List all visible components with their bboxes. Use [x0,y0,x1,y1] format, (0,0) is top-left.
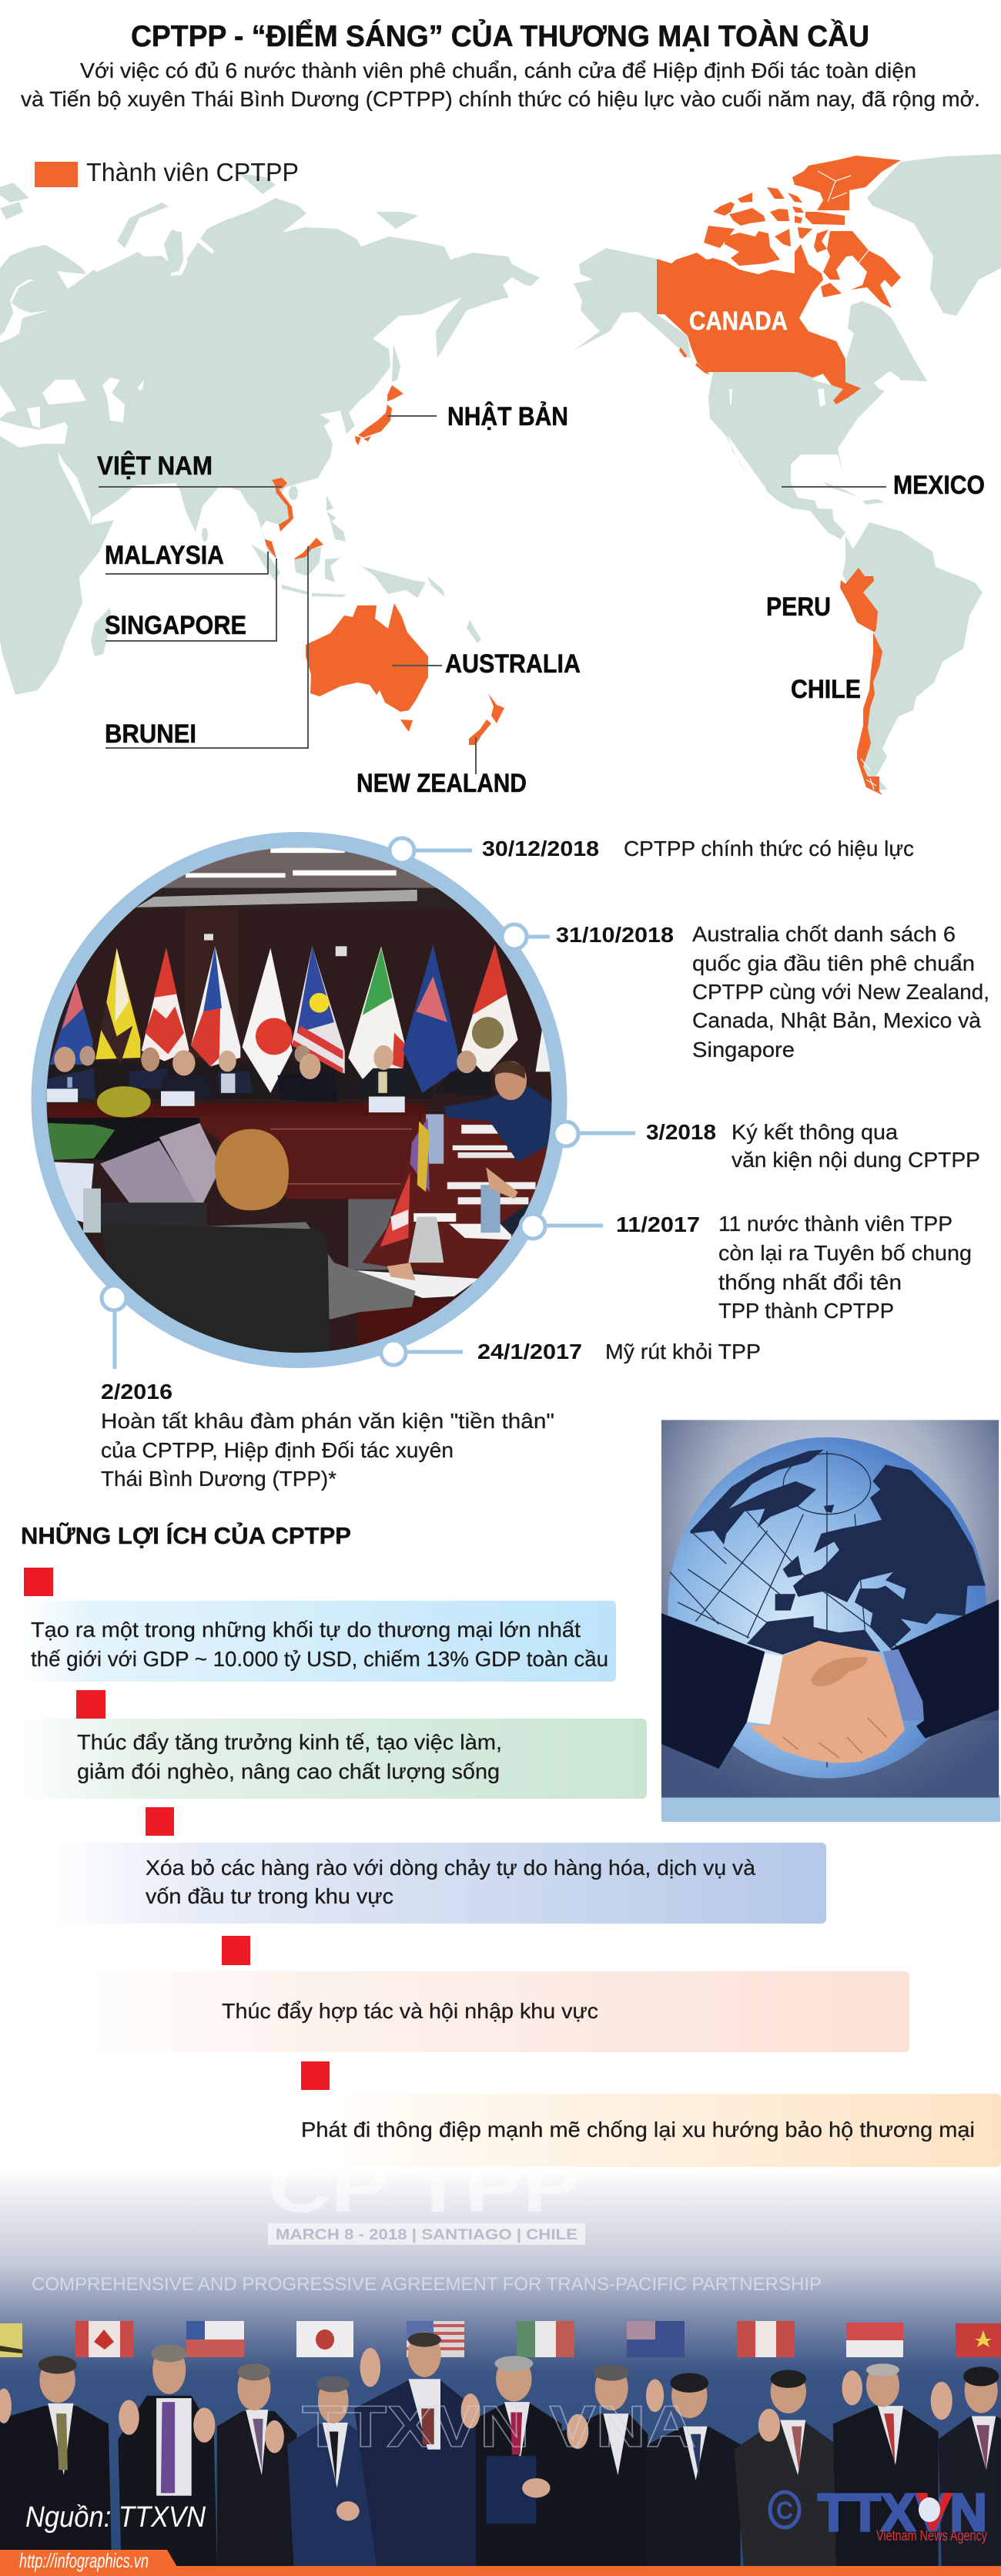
map labels with leader lines: BRUNEI [105,719,196,749]
right side table [348,1114,554,1351]
backdrop text [32,2166,821,2290]
intro text [21,59,980,111]
connectors and nodes [102,838,635,1369]
event 2/2016: của CPTPP, Hiệp định Đối tác xuyên [101,1438,454,1462]
event 24/1/2017: 24/1/2017 [477,1340,582,1363]
benefit 5 [293,2061,1001,2167]
flags behind the table [49,944,554,1093]
event 3/2018 [646,1120,980,1172]
event 31/10/2018: CPTPP cùng với New Zealand, [692,980,989,1004]
logo: TTXVN: C [776,2497,793,2524]
benefit 3: vốn đầu tư trong khu vực [146,1884,393,1908]
name plates [47,1088,405,1112]
circular meeting photo [46,847,551,1353]
Ellesmere fjords [818,171,876,790]
handshake artwork [661,1420,999,1798]
event 31/10/2018 [556,922,989,1062]
man in blue suit [444,1062,554,1162]
benefit 3: Xóa bỏ các hàng rào với dòng chảy tự do hàng hóa, dịch vụ và [146,1856,755,1880]
map labels with leader lines: AUSTRALIA [445,649,581,679]
event 24/1/2017: Mỹ rút khỏi TPP [605,1340,761,1363]
legend: Thành viên CPTPP [86,158,299,186]
handshake and globe photo [661,1420,1000,1822]
map labels with leader lines: PERU [766,592,831,622]
CPTPP members in orange [265,156,901,795]
event 31/10/2018: Australia chốt danh sách 6 [692,922,956,946]
water cut-outs [0,234,902,524]
watermark: TTXVN VNA [302,2394,696,2460]
map labels with leader lines: SINGAPORE [105,611,246,640]
event 11/2017 [616,1212,972,1323]
event 31/10/2018: 31/10/2018 [556,923,674,947]
logo: TTXVN: TTXVN [818,2483,987,2542]
map labels with leader lines: CANADA [689,307,788,336]
intro text: và Tiến bộ xuyên Thái Bình Dương (CPTPP) chính thức có hiệu lực vào cuối năm nay, đã rộng mở. [21,87,980,111]
map labels with leader lines: NEW ZEALAND [357,769,527,798]
map labels with leader lines: NHẬT BẢN [447,402,568,431]
bottom photo: signing ceremony [0,2148,1001,2576]
benefits heading: NHỮNG LỢI ÍCH CỦA CPTPP [21,1521,351,1549]
event 30/12/2018 [482,837,914,860]
event 2/2016 [101,1380,554,1491]
event 2/2016: Thái Bình Dương (TPP)* [101,1467,336,1491]
world map [0,154,1001,798]
backdrop text: CP TPP [268,2148,581,2227]
benefit 3 [45,1807,826,1924]
intro text: Với việc có đủ 6 nước thành viên phê chuẩn, cánh cửa để Hiệp định Đối tác toàn diện [80,59,916,82]
land masses [0,154,1001,790]
event 30/12/2018: CPTPP chính thức có hiệu lực [624,837,914,860]
benefit 2: giảm đói nghèo, nâng cao chất lượng sống [77,1759,500,1783]
event 2/2016: 2/2016 [101,1380,172,1404]
delegates row [48,1045,493,1102]
event 24/1/2017 [477,1340,761,1363]
benefit 4: Thúc đẩy hợp tác và hội nhập khu vực [222,1999,598,2023]
ring around photo [38,840,559,1360]
delegates standing and waving [0,2332,1001,2566]
event 31/10/2018: Canada, Nhật Bản, Mexico và [692,1008,981,1032]
map labels with leader lines: MALAYSIA [105,541,224,570]
map labels with leader lines [97,307,985,798]
benefit 1: Tạo ra một trong những khối tự do thương mại lớn nhất [31,1618,581,1642]
benefit 1: thế giới với GDP ~ 10.000 tỷ USD, chiếm 13% GDP toàn cầu [31,1647,608,1671]
map labels with leader lines: MEXICO [893,471,985,500]
row of member flags [0,2321,1001,2357]
seated woman and chair [102,1129,415,1354]
benefit 1 [19,1568,616,1682]
event 11/2017: thống nhất đổi tên [718,1270,902,1294]
event 3/2018: 3/2018 [646,1120,716,1144]
event 2/2016: Hoàn tất khâu đàm phán văn kiện "tiền thân" [101,1409,554,1433]
title: CPTPP - “ĐIỂM SÁNG” CỦA THƯƠNG MẠI TOÀN CẦU [131,18,869,53]
benefit 2: Thúc đẩy tăng trưởng kinh tế, tạo việc làm, [77,1730,502,1754]
photo base band [661,1795,1000,1822]
event 11/2017: TPP thành CPTPP [718,1299,894,1323]
map labels with leader lines: CHILE [791,675,861,704]
flowers and plant [48,1086,151,1160]
benefit 2 [8,1690,647,1799]
source credit: Nguồn: TTXVN [25,2501,206,2534]
event 11/2017: 11 nước thành viên TPP [718,1212,952,1236]
event 30/12/2018: 30/12/2018 [482,837,599,860]
backdrop gradient [0,2168,1001,2576]
event 31/10/2018: Singapore [692,1038,795,1062]
table front [45,1104,426,1118]
map labels with leader lines: VIỆT NAM [97,451,213,481]
panel: benefits [8,1521,1001,2167]
chair backs behind the flags [45,1062,433,1098]
event 11/2017: còn lại ra Tuyên bố chung [718,1241,972,1265]
event 3/2018: văn kiện nội dung CPTPP [732,1148,980,1172]
backdrop text: MARCH 8 - 2018 | SANTIAGO | CHILE [276,2227,578,2243]
event 3/2018: Ký kết thông qua [732,1120,898,1144]
laptop screens [53,1123,221,1233]
backdrop text: COMPREHENSIVE AND PROGRESSIVE AGREEMENT FOR TRANS-PACIFIC PARTNERSHIP [32,2274,822,2295]
event 31/10/2018: quốc gia đầu tiên phê chuẩn [692,951,975,975]
footer bar: http://infographics.vn [19,2549,149,2572]
event 11/2017: 11/2017 [616,1213,700,1236]
benefit 5: Phát đi thông điệp mạnh mẽ chống lại xu hướng bảo hộ thương mại [301,2118,975,2142]
panel: timeline [23,824,989,1491]
benefit 4 [45,1936,909,2052]
footer bar [0,2549,1001,2576]
